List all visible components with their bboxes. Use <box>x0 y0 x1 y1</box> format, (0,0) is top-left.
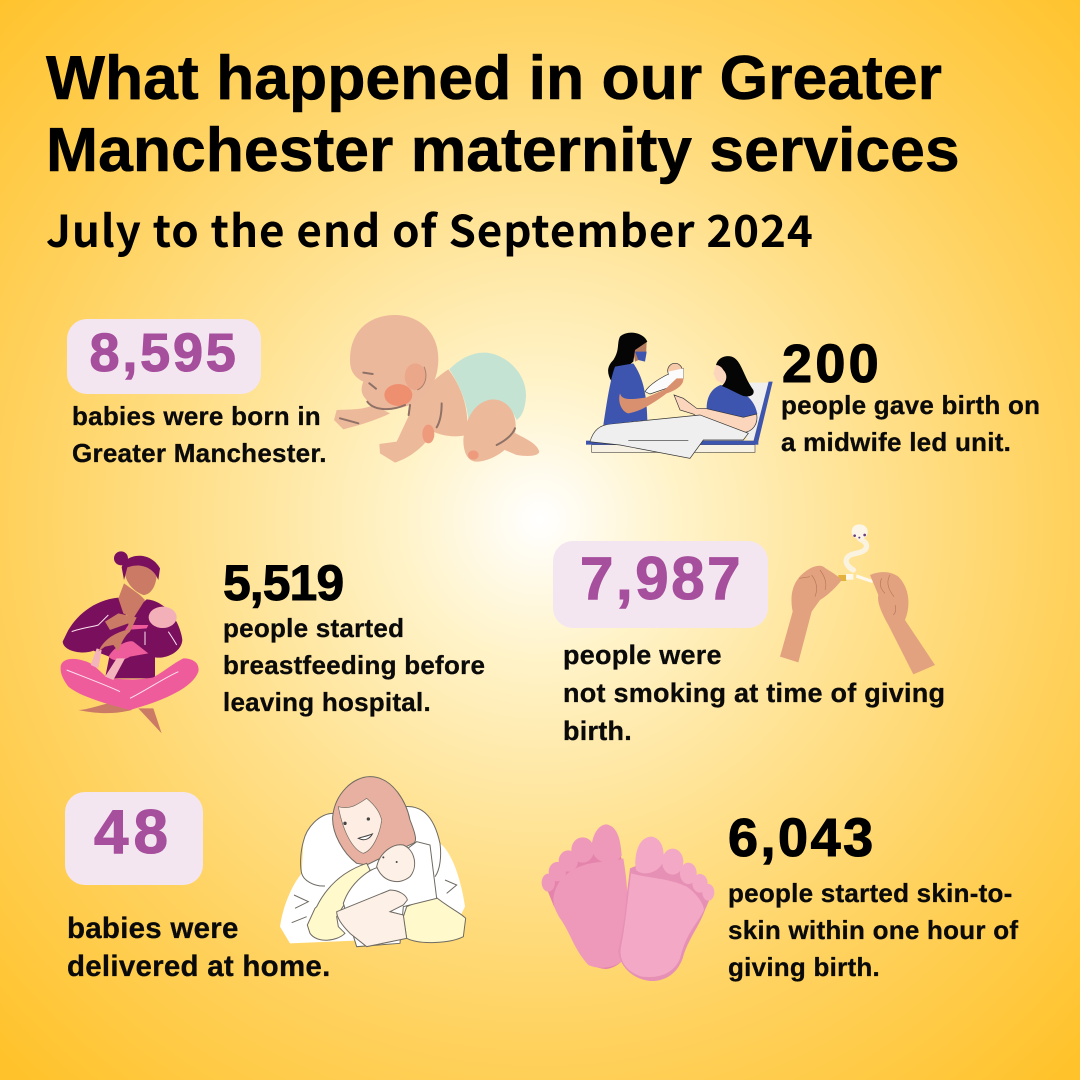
text: skin-to-skin: giving birth. <box>728 952 880 982</box>
title <box>46 43 960 185</box>
icon: midwife and mother <box>586 332 773 459</box>
text: midwife led unit: people gave birth on <box>781 390 1040 420</box>
text: skin-to-skin <box>728 878 1018 982</box>
text: midwife led unit: a midwife led unit. <box>781 427 1011 457</box>
text: breastfeeding <box>223 613 485 717</box>
number: 6,043: 6,043 <box>728 808 876 868</box>
pill: 7,987 <box>553 541 768 628</box>
text: not smoking <box>563 640 945 746</box>
panel: babies born <box>67 319 327 468</box>
text: not smoking: birth. <box>563 716 632 746</box>
icon: breastfeeding mother <box>60 551 199 734</box>
panel: midwife led unit <box>781 334 1040 457</box>
panel: home births <box>65 792 331 983</box>
text: home births: delivered at home. <box>67 950 331 983</box>
text: skin-to-skin: skin within one hour of <box>728 915 1018 945</box>
panel: breastfeeding <box>223 555 485 717</box>
number: 8,595: 8,595 <box>90 323 239 383</box>
panel: skin-to-skin <box>728 808 1018 982</box>
number: 5,519: 5,519 <box>223 555 343 611</box>
subtitle: July to the end of September 2024 <box>46 196 814 260</box>
text: home births: babies were <box>67 912 239 945</box>
title: Manchester maternity services <box>46 115 960 185</box>
text: babies born <box>72 401 327 468</box>
icon: baby feet <box>542 824 714 981</box>
text: midwife led unit <box>781 390 1040 457</box>
text: skin-to-skin: people started skin-to- <box>728 878 1013 908</box>
text: not smoking: not smoking at time of giving <box>563 678 945 708</box>
text: babies born: babies were born in <box>72 401 321 431</box>
pill: 48 <box>65 792 203 885</box>
title: What happened in our Greater <box>46 43 942 113</box>
text: breastfeeding: leaving hospital. <box>223 687 431 717</box>
icon: mother holding baby <box>280 776 466 948</box>
text: breastfeeding: people started <box>223 613 404 643</box>
text: babies born: Greater Manchester. <box>72 438 327 468</box>
text: not smoking: people were <box>563 640 722 670</box>
number: 7,987: 7,987 <box>580 545 743 612</box>
number: 48: 48 <box>94 798 173 866</box>
icon: crawling baby <box>334 315 540 462</box>
panel: not smoking <box>553 541 945 746</box>
pill: 8,595 <box>67 319 261 394</box>
icon: hands breaking cigarette <box>780 524 935 674</box>
number: 200: 200 <box>782 334 882 394</box>
text: breastfeeding: breastfeeding before <box>223 650 485 680</box>
text: home births <box>67 912 331 983</box>
